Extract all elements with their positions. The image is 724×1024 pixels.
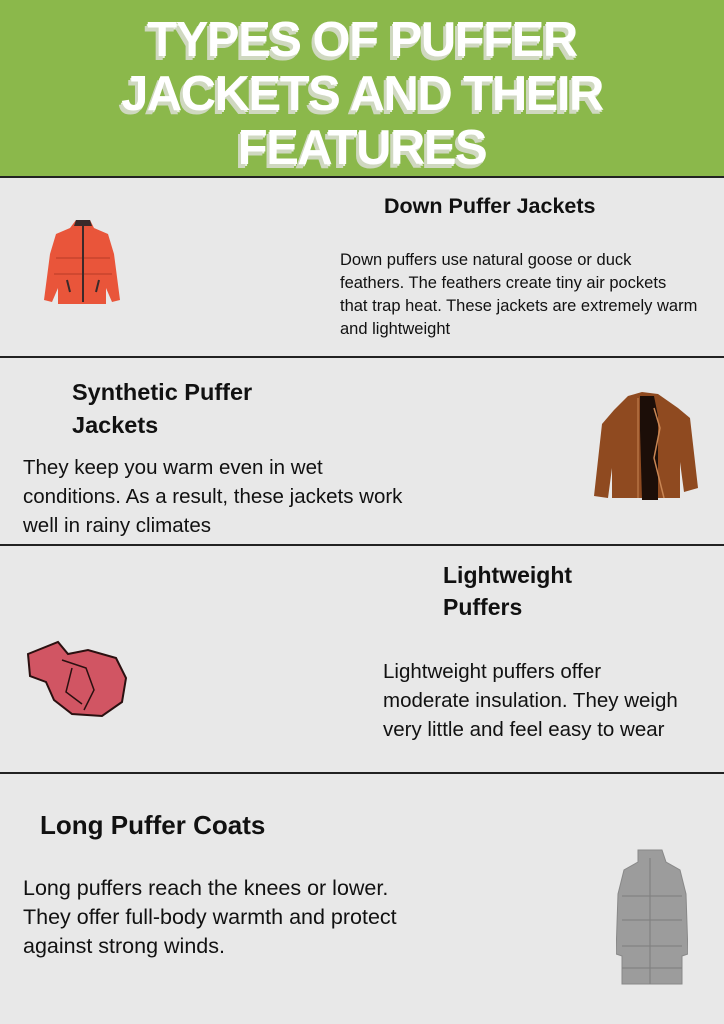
text [23, 876, 397, 958]
heading: Down Puffer Jackets [384, 194, 595, 218]
text: moderate insulation. They weigh [383, 689, 678, 712]
panel: down puffer [44, 194, 697, 338]
title: JACKETS AND THEIR [121, 67, 603, 121]
heading: Long Puffer Coats [40, 810, 265, 840]
text: that trap heat. These jackets are extremely warm [340, 297, 697, 315]
text: They offer full-body warmth and protect [23, 905, 397, 929]
icon: glove [26, 640, 127, 717]
text: very little and feel easy to wear [383, 718, 664, 741]
title: TYPES OF PUFFER [147, 13, 577, 67]
text: and lightweight [340, 320, 450, 338]
heading: Lightweight [443, 562, 572, 588]
heading: Synthetic Puffer [72, 379, 252, 405]
text: Long puffers reach the knees or lower. [23, 876, 388, 900]
icon: red puffer jacket [44, 220, 120, 304]
text: Down puffers use natural goose or duck [340, 251, 631, 269]
text [340, 251, 697, 338]
icon: brown jacket [594, 392, 698, 500]
text: conditions. As a result, these jackets work [23, 485, 402, 508]
heading: Jackets [72, 412, 158, 438]
text: They keep you warm even in wet [23, 456, 323, 479]
heading: Puffers [443, 594, 522, 620]
title: FEATURES [238, 121, 486, 175]
panel: long coats [23, 810, 688, 984]
title [118, 13, 604, 175]
text [23, 456, 402, 537]
text: well in rainy climates [23, 514, 211, 537]
heading [72, 379, 252, 438]
text [383, 660, 678, 741]
icon: long grey coat [616, 850, 688, 984]
heading [443, 562, 572, 620]
text: Lightweight puffers offer [383, 660, 601, 683]
text: feathers. The feathers create tiny air pockets [340, 274, 666, 292]
panel: lightweight [26, 562, 678, 741]
text: against strong winds. [23, 934, 225, 958]
panel: synthetic [23, 379, 698, 537]
header [0, 0, 724, 176]
